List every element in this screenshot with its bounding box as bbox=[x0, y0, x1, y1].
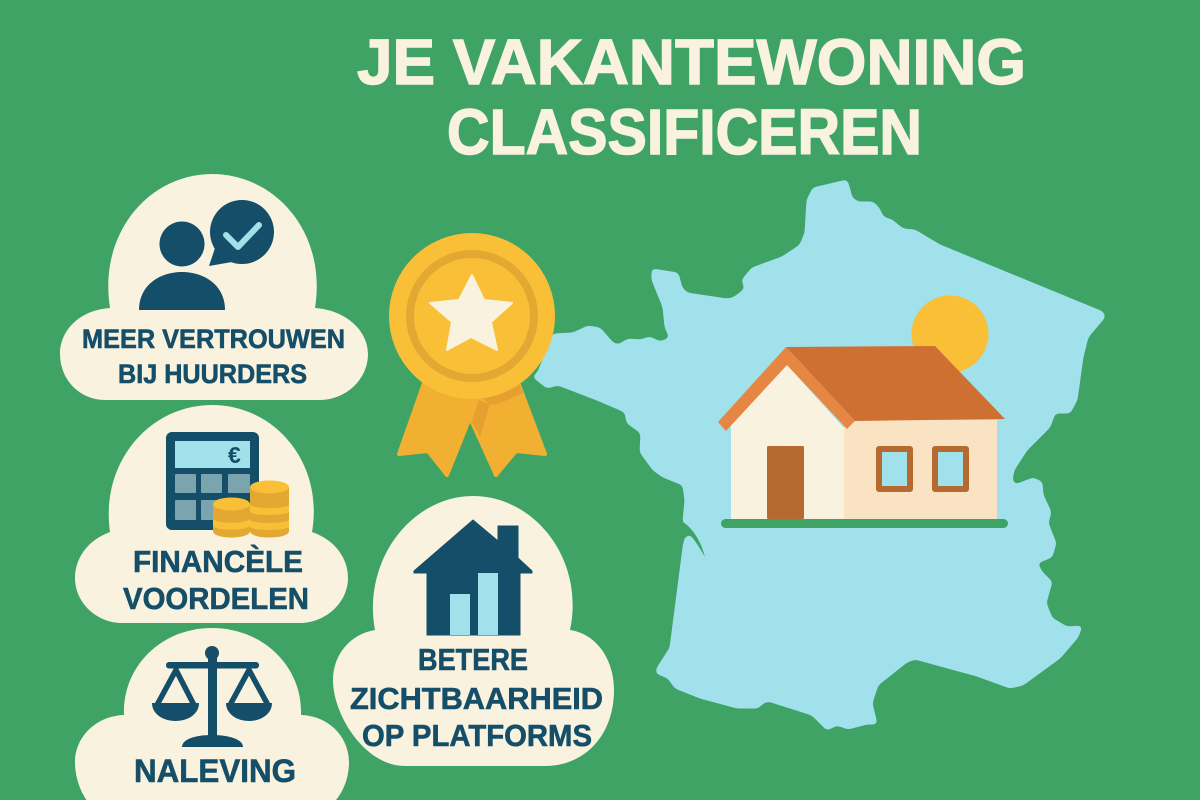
title: CLASSIFICEREN bbox=[447, 96, 922, 168]
label bbox=[123, 544, 309, 616]
star bbox=[430, 275, 512, 350]
window right bbox=[935, 449, 966, 489]
title: JE VAKANTEWONING bbox=[357, 26, 1026, 98]
right wall bbox=[844, 420, 997, 519]
label: FINANCÈLE bbox=[133, 544, 303, 579]
panel: financiele voordelen bbox=[75, 405, 348, 623]
label: MEER VERTROUWEN bbox=[82, 324, 345, 354]
label bbox=[350, 642, 603, 753]
cloud background bbox=[75, 405, 348, 623]
icon: coin stacks bbox=[213, 480, 289, 538]
cloud background bbox=[333, 496, 614, 766]
gable trim bbox=[718, 347, 855, 431]
panel: naleving bbox=[75, 628, 349, 800]
medal ring bbox=[410, 254, 534, 378]
title bbox=[357, 26, 1026, 168]
roof bbox=[786, 346, 1005, 421]
map of France bbox=[533, 180, 1105, 730]
icon: house with bars bbox=[414, 520, 532, 635]
label: OP PLATFORMS bbox=[362, 718, 592, 753]
cloud background bbox=[75, 628, 349, 800]
icon: person with speech bubble bbox=[139, 200, 274, 310]
label: NALEVING bbox=[134, 753, 296, 789]
icon: calculator bbox=[166, 432, 259, 530]
cloud background bbox=[60, 174, 368, 400]
icon: calculator: € bbox=[228, 442, 241, 468]
label: ZICHTBAARHEID bbox=[350, 681, 603, 716]
label bbox=[82, 324, 345, 389]
ribbons bbox=[399, 380, 545, 475]
label: BIJ HUURDERS bbox=[118, 359, 307, 389]
label: BETERE bbox=[418, 642, 528, 677]
ground line bbox=[721, 519, 1008, 528]
door bbox=[767, 446, 804, 519]
icon: balance scale bbox=[152, 646, 272, 747]
sun bbox=[912, 296, 988, 372]
window left bbox=[879, 449, 910, 489]
panel: betere zichtbaarheid op platforms bbox=[333, 496, 614, 766]
medal badge bbox=[389, 233, 555, 475]
house illustration bbox=[718, 346, 1008, 528]
label: VOORDELEN bbox=[123, 581, 309, 616]
panel: meer vertrouwen bij huurders bbox=[60, 174, 368, 400]
left gabled wall bbox=[731, 365, 844, 519]
medal disc bbox=[389, 233, 555, 399]
